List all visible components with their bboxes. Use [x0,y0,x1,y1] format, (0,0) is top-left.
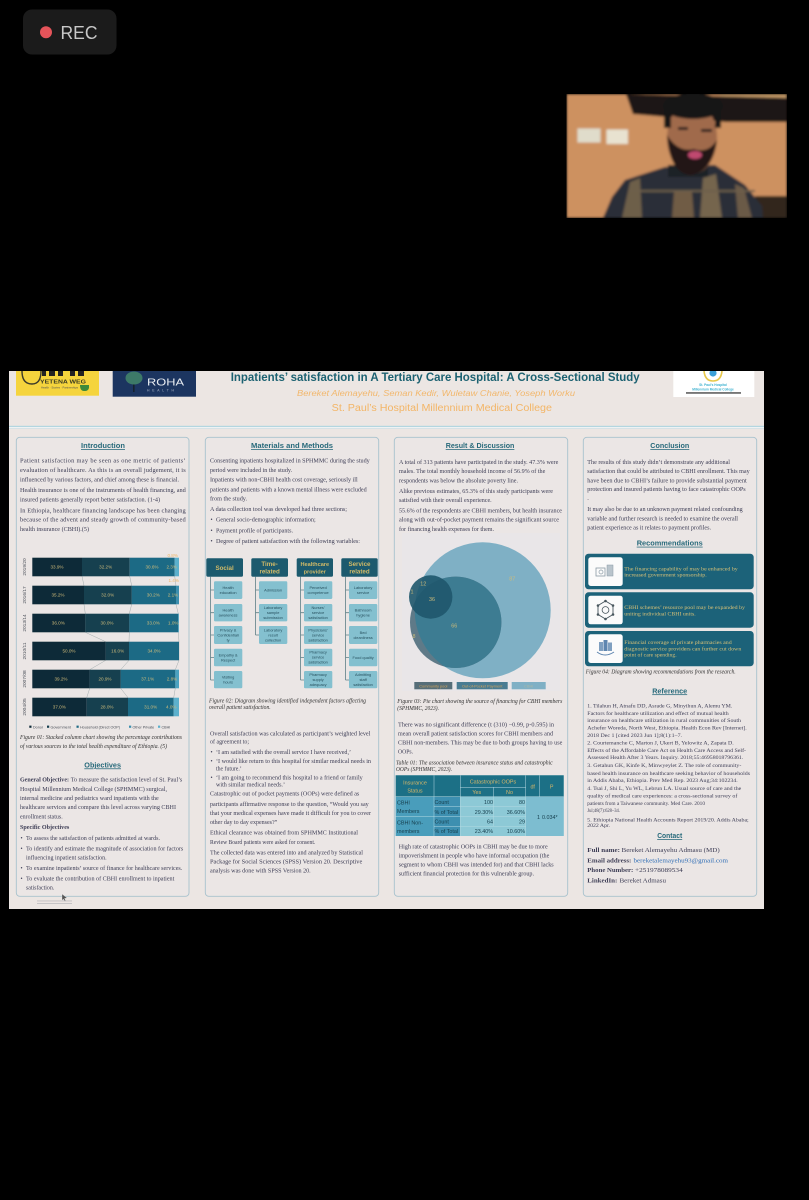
caption: figure 4: Figure 04: Diagram showing recommendations from the research. [585,669,736,676]
column: time-related: Laboratory [264,627,282,632]
column: healthcare provider: Physicians’ [308,627,328,632]
methods text: measures and analysis: ‘I am satisfied with the overall service I have received,’ [216,749,351,756]
column: healthcare provider: service [312,655,324,660]
methods text: • [210,518,213,524]
pie chart legend [414,682,546,689]
table: insurance status and catastrophic OOPs: Insurance [403,780,427,786]
heading: materials and methods: Materials and Methods [251,441,333,450]
table: insurance status and catastrophic OOPs: Yes [472,790,481,796]
column: healthcare provider: service [312,610,324,615]
column: healthcare provider: Nurses’ [311,605,325,610]
results text: significance [398,721,562,756]
column: social: hours [223,680,233,685]
column: healthcare provider: competence [307,590,329,595]
reference list: 3. Getahun GK, Kinfe K, Minwyeylet Z. The role of community- [587,762,741,769]
methods text: measures and analysis: ‘I would like return to this hospital for similar medical needs in [216,758,372,765]
caption: table 1: Table 01: The association between insurance status and catastrophic [396,760,553,766]
caption: figure 1: of various sources to the total health expenditure of Ethiopia. (5) [20,743,167,750]
stacked bar chart: health expenditure sources: 2016/17 [22,586,28,604]
column: time-related [251,558,288,644]
recommendation 2: CBHI schemes’ resource pool may be expanded by [624,605,745,611]
table: insurance status and catastrophic OOPs: 64 [487,820,493,826]
reference list: Achefer Woreda, North West, Ethiopia. Health Econ Rev [Internet]. [587,724,747,732]
table: insurance status and catastrophic OOPs: members [397,829,420,835]
stacked bar chart: health expenditure sources: 2.3% [166,565,177,570]
reference list: in Addis Ababa, Ethiopia. Prev Med Rep. 2023 Aug;34:102234. [587,778,738,784]
heading: result and discussion: Result & Discussion [446,441,515,450]
methods text [210,458,370,545]
caption: figure 2: Figure 02: Diagram showing identified independent factors affecting [208,698,367,705]
results text: significance: There was no significant difference (t (310) −0.99, p-0.595) in [398,721,555,728]
objectives text: To examine inpatients’ source of finance for healthcare services. [26,865,183,872]
panel: introduction and objectives [16,437,189,896]
poster [9,365,764,909]
column: social: ty [227,637,230,642]
reference list: quality of medical care experiences: a cross-sectional survey of [587,792,737,800]
stacked bar chart: health expenditure sources: 2.1% [168,593,178,598]
objectives text: • [20,846,23,852]
column: healthcare provider: supply [312,677,324,682]
methods text: measures and analysis [210,731,372,875]
caption: figure 2 [208,698,367,711]
heading: reference: Reference [652,686,687,695]
chart legend: Other Private [132,725,154,729]
introduction text [20,458,186,533]
caption: figure 3: (SPHMMC, 2023). [397,705,439,712]
table: insurance status and catastrophic OOPs: Members [397,809,420,815]
methods text: Payment profile of participants. [216,527,293,534]
reference list: 4. Tsai J, Shi L, Yu WL, Lebrun LA. Usual source of care and the [587,785,742,792]
table: insurance status and catastrophic OOPs: Catastrophic OOPs [470,780,517,786]
methods text: measures and analysis: participants affirmative response to the question, “Would you say [210,801,369,808]
column: service related: hygiene [356,613,370,618]
chart legend: Donor [33,725,44,729]
discussion text: High rate of catastrophic OOPs in CBHI may be due to more [399,843,548,850]
stacked bar chart: health expenditure sources: 36.0% [52,621,65,626]
logo: Yetena Wegi: YETENA WEG [40,380,86,386]
webcam video of speaker [566,93,787,218]
introduction text: Patient satisfaction may be seen as one metric of patients’ [20,458,186,465]
column: service related: Bed [360,630,367,635]
methods text: • [210,539,213,545]
column: time-related: collection [265,637,281,642]
conclusion text: It may also be due to an unknown payment related confounding [587,506,743,513]
recommendation 3: point of care spending. [624,652,677,659]
column: social [206,558,243,688]
contact details: Full name: [587,847,620,854]
column: social: awareness [219,613,238,618]
stacked bar chart: health expenditure sources: 30.6% [145,565,159,570]
recommendation 2: uniting individual CBHI units. [624,611,696,617]
contact details: LinkedIn: [587,877,617,884]
footer fine print [37,900,72,904]
column: healthcare provider: adequacy [310,682,327,687]
stacked bar chart: health expenditure sources: 2.8% [167,677,177,682]
stacked bar chart: health expenditure sources: 32.0% [101,593,114,598]
column: service related: related [349,568,370,575]
stacked bar chart: health expenditure sources: 50.0% [62,649,76,654]
methods text: Inpatients with non-CBHI health cost coverage, seriously ill [210,477,358,484]
introduction text: Health insurance is one of the instruments of health financing, and [20,487,186,494]
institution: St. Paul’s Hospital Millennium Medical College [332,403,553,414]
stacked bar chart: health expenditure sources: 30.0% [100,621,114,626]
contact details: +251978089534 [635,867,683,874]
results text: for financing health expenses for them. [399,526,494,533]
caption: table 1: OOPs (SPHMMC, 2023). [396,766,452,773]
conclusion text: variable and further research is needed to examine the overall [587,515,738,522]
column: service related: staff [359,677,368,682]
results text: A total of 313 patients have participated in the study. 47.3% were [399,459,558,466]
methods text: measures and analysis: analysis was done with SPSS Version 20. [210,868,311,875]
methods text: measures and analysis: with similar medical needs.’ [216,781,285,788]
introduction text: because of the advent and steady growth of community-based [20,517,186,524]
stacked bar chart: health expenditure sources: 2004/05 [22,698,28,716]
results text: Alike previous estimates, 65.3% of this study participants were [399,488,553,495]
chart legend: Government [50,725,71,729]
column: service related: Bathroom [355,608,372,613]
conclusion text: satisfaction that could be attributed to CBHI enrollment. This may [587,468,750,475]
discussion text: sufficient financial protection for this vulnerable group. [399,871,534,878]
table: insurance status and catastrophic OOPs: CBHI Non- [397,820,423,826]
heading: conclusion: Conclusion [650,441,690,450]
column: social: Confidentiali [217,632,239,637]
contact details: Phone Number: [587,867,633,874]
results text: significance: mean overall patient satisfaction scores for CBHI members and [398,730,554,737]
table: insurance status and catastrophic OOPs: P [550,784,554,790]
methods text: measures and analysis: of agreement to; [210,738,249,745]
title: Inpatients’ satisfaction in A Tertiary Care Hospital: A Cross-Sectional Study [231,371,640,384]
conclusion text: . [587,495,589,502]
results text: along with out-of-pocket payment remains the significant source [399,517,559,524]
contact details: Email address: [587,857,631,864]
panel: result and discussion [394,437,568,896]
venn pie chart: source of financing: 8 [412,634,416,640]
objectives text: Hospital Millennium Medical College (SPHMMC) surgical, [20,786,167,793]
objectives text: General Objective: [20,777,69,784]
methods text: measures and analysis: Package for Social Sciences (SPSS) Version 20. Descriptive [210,859,362,866]
methods text: measures and analysis: • [210,775,213,781]
table: insurance status and catastrophic OOPs: 100 [484,800,493,806]
methods text: General socio-demographic information; [216,517,316,524]
recommendation 3: Financial coverage of private pharmacies and [624,639,732,646]
discussion text: impoverishment in people who have informal occupation (the [399,852,549,859]
contact details: Bereket Admasu [620,877,667,884]
conclusion text: have been due to CBHI’s failure to provide substantial payment [587,477,747,484]
stacked bar chart: health expenditure sources: 2013/14 [22,614,28,632]
chart legend: CBHI [162,725,170,729]
venn pie chart: source of financing: 87 [509,577,515,583]
table: insurance status and catastrophic OOPs: 29 [519,820,525,826]
table: insurance status and catastrophic OOPs: No [506,790,513,796]
caption: figure 3: Figure 03: Pie chart showing the source of financing for CBHI members [396,698,563,705]
column: healthcare provider: provider [304,569,327,575]
conclusion text: protection and insured patients having to face catastrophic OOPs [587,486,746,493]
objectives text: Specific Objectives [20,824,70,831]
conclusion text [587,459,750,531]
column: service related: Laboratory [354,585,372,590]
logo: Roha Health [112,371,196,397]
methods text: patients and patients with a known mental illness were excluded [210,486,367,493]
logo: St. Paul's Hospital [673,371,754,397]
column: healthcare provider: Healthcare [300,562,329,568]
methods text: • [210,528,213,534]
objectives text: healthcare services and compare this level across varying CBHI [20,804,176,811]
table: insurance status and catastrophic OOPs [396,775,564,836]
column: social: Health [222,608,234,613]
reference list: 2. Courtemanche C, Marton J, Ukert B, Yelowitz A, Zapata D. [587,740,734,746]
panel: conclusion, recommendations, reference, contact [583,437,757,896]
conclusion text: The results of this study didn’t demonstrate any additional [587,459,730,466]
column: social: Health [222,585,234,590]
recommendation 3: diagnostic service providers can further cut down [624,645,741,652]
objectives text: • [20,866,23,872]
stacked bar chart: health expenditure sources: 34.0% [147,649,161,654]
column: time-related: sample [267,610,279,615]
objectives text: • [20,836,23,842]
stacked bar chart: health expenditure sources: 33.0% [147,621,160,626]
discussion text [399,843,554,878]
methods text: measures and analysis: the future.’ [216,765,242,772]
column: healthcare provider: Perceived [309,585,327,590]
reference list: 2018 Dec 1 [cited 2023 Jun 1];8(1):1–7. [587,732,683,739]
conclusion text: patient experience as it relates to payment profiles. [587,524,711,531]
methods text: measures and analysis: • [210,759,213,765]
objectives text: satisfaction. [26,885,55,892]
column: time-related: Laboratory [264,605,282,610]
table: insurance status and catastrophic OOPs: CBHI [397,800,410,806]
objectives text: internal medicine and pediatrics ward inpatients with the [20,795,159,802]
methods text: measures and analysis: other day to day expenses?” [210,819,277,826]
methods text: Consenting inpatients hospitalized in SPHMMC during the study [210,458,370,465]
objectives text: To assess the satisfaction of patients admitted at wards. [26,835,160,842]
column: social: Respect [221,657,236,662]
methods text: A data collection tool was developed had three sections; [210,506,347,513]
stacked bar chart: health expenditure sources: 2007/08 [22,670,28,688]
column: service related: cleanliness [353,635,373,640]
recording indicator [23,10,116,54]
column: healthcare provider: satisfaction [308,660,328,665]
stacked bar chart: health expenditure sources: 37.1% [141,677,154,682]
reference list: 1. Tilahun H, Atnafu DD, Asrade G, Minyihun A, Alemu YM. [587,702,733,710]
venn pie chart: source of financing [409,542,551,690]
logo: Yetena Wegi: Health · Stories · Partnerships [41,386,79,390]
table: insurance status and catastrophic OOPs: 10.60% [507,829,525,835]
column: time-related: submission [263,615,283,620]
methods text: from the study. [210,495,247,502]
table: insurance status and catastrophic OOPs: 23.40% [475,829,493,835]
column: time-related: Time- [261,561,278,568]
recommendation 1 [585,554,754,589]
chart legend [29,725,170,729]
methods text: measures and analysis: Catastrophic out of pocket payments (OOPs) were defined as [210,791,360,798]
discussion text: segment to whom CBHI was intended for) and that CBHI lacks [399,862,554,869]
stacked bar chart: health expenditure sources: 32.2% [99,565,112,570]
mouse cursor [62,894,67,902]
table: insurance status and catastrophic OOPs: 29.30% [475,810,493,816]
chart legend: Household (Direct OOP) [80,725,120,729]
introduction text: In Ethiopia, healthcare financing landscape has been changing [20,507,186,514]
column: healthcare provider: service [312,632,324,637]
table: insurance status and catastrophic OOPs: Status [407,788,423,794]
venn pie chart: source of financing: 66 [451,623,457,629]
column: social: Visiting [222,675,234,680]
introduction text: evaluation of healthcare. As this is an overall judgement, it is [20,467,186,474]
column: healthcare provider: Pharmacy [309,650,327,655]
column: service related [341,558,378,688]
venn pie chart: source of financing: 36 [429,597,435,603]
objectives text: To evaluate the contribution of CBHI enrollment to inpatient [26,875,175,882]
objectives text: • [20,876,23,882]
heading: objectives: Objectives [84,760,121,769]
stacked bar chart: health expenditure sources: 4.0% [166,705,177,710]
methods text: measures and analysis: ‘I am going to recommend this hospital to a friend or family [216,774,363,781]
stacked bar chart: health expenditure sources: 30.2% [147,593,160,598]
contact details: Bereket Alemayehu Admasu (MD) [622,847,720,854]
recommendation 1: increased government sponsorship. [624,573,707,579]
methods text: period were included in the study. [210,467,292,474]
column: social: education [220,590,237,595]
table: insurance status and catastrophic OOPs: % of Total [434,829,458,835]
caption: figure 1: Figure 01: Stacked column chart showing the percentage contributions [19,734,182,741]
methods text: Degree of patient satisfaction with the following variables: [216,538,360,545]
venn pie chart: source of financing: 1 [410,590,414,596]
stacked bar chart: health expenditure sources: 20.9% [98,677,112,682]
column: social: Privacy & [220,627,237,632]
introduction text: health insurance (CBHI).(5) [20,526,89,533]
methods text: measures and analysis: The collected data was entered into and analyzed by Statistical [210,849,363,856]
column: healthcare provider: Pharmacy [309,672,327,677]
diagram: independent factors [206,558,378,688]
objectives text: influencing inpatient satisfaction. [26,855,107,862]
stacked bar chart: health expenditure sources: 39.2% [54,677,68,682]
stacked bar chart: health expenditure sources: 33.9% [50,565,64,570]
objectives text: enrollment status. [20,813,63,820]
table: insurance status and catastrophic OOPs: df [530,784,535,790]
pie chart legend: Community pool [419,683,447,688]
table: insurance status and catastrophic OOPs: 80 [519,800,525,806]
results text: satisfied with their overall experience. [399,497,492,504]
stacked bar chart: health expenditure sources [22,553,179,729]
methods text: measures and analysis: Ethical clearance was obtained from SPHMMC Institutional [210,830,358,837]
heading: recommendations: Recommendations [637,539,703,548]
results text: significance: OOPs. [398,749,413,756]
reference list: based health insurance on healthcare seeking behavior of households [587,770,751,777]
stacked bar chart: health expenditure sources: 2019/20 [22,558,28,576]
column: time-related: result [268,632,279,637]
caption: figure 2: overall patient satisfaction. [209,704,271,711]
table: insurance status and catastrophic OOPs: 36.60% [507,810,525,816]
column: healthcare provider: satisfaction [308,615,328,620]
stacked bar chart: health expenditure sources: 1.0% [168,621,179,626]
authors: Bereket Alemayehu, Seman Kedir, Wuletaw Chanie, Yoseph Worku [297,388,575,398]
logo: Roha Health: HEALTH [147,388,175,392]
column: service related: service [357,590,369,595]
results text [399,459,562,533]
pie chart legend: CBHI [524,683,533,688]
logo: Yetena Wegi [16,371,99,396]
table: insurance status and catastrophic OOPs: Count [434,820,449,826]
reference list: Jul;48(7):628–34. [587,807,620,814]
objectives text: To measure the satisfaction level of St. Paul’s [71,777,183,784]
stacked bar chart: health expenditure sources: 2010/11 [22,642,28,659]
stacked bar chart: health expenditure sources: 1.4% [168,578,179,583]
methods text: measures and analysis: Overall satisfaction was calculated as participant’s weighted level [210,731,371,738]
results text: significance: CBHI non-members. This may be due to both groups having to use [398,740,562,747]
recommendation 3 [585,631,754,666]
column: service related: Admitting [355,672,371,677]
reference list: Assessed Health After 3 Years. Inquiry. 2018;55:46958018796361. [587,754,744,761]
table: insurance status and catastrophic OOPs: 0.034* [542,815,558,821]
table: insurance status and catastrophic OOPs: Count [434,800,449,806]
reference list: Effects of the Affordable Care Act on Health Care Access and Self- [587,747,746,754]
reference list: 5. Ethiopia National Health Accounts Report 2019/20. Addis Ababa; [587,818,749,824]
results text: males. The total monthly household income of 56.9% of the [399,468,545,475]
objectives text [20,777,184,892]
objectives text: To identify and estimate the magnitude of association for factors [26,845,184,852]
heading: contact: Contact [657,831,683,840]
stacked bar chart: health expenditure sources: 16.0% [111,649,124,654]
stacked bar chart: health expenditure sources: 28.0% [100,705,114,710]
methods text: measures and analysis: Review Board patients were asked for consent. [210,839,316,846]
reference list: patients from a Taiwanese community. Med Care. 2010 [587,800,705,807]
caption: table 1 [396,760,553,773]
table: insurance status and catastrophic OOPs: % of Total [434,810,458,816]
contact details: bereketalemayehu93@gmail.com [634,857,729,864]
recommendation 1: The financing capability of may be enhanced by [624,565,738,572]
column: time-related: Admission [264,587,282,592]
recommendation 2 [585,592,754,628]
introduction text: influenced by various factors, and chief among these is financial. [20,476,179,483]
results text: 55.6% of the respondents are CBHI members, but health insurance [399,508,562,515]
introduction text: insured patients generally report better satisfaction. (1-4) [20,496,160,503]
methods text: measures and analysis: that your medical expenses have made it difficult for you to cover [210,810,372,817]
logo: Roha Health: ROHA [147,376,184,388]
stacked bar chart: health expenditure sources: 31.0% [144,705,157,710]
caption: figure 3 [396,698,563,712]
contact details [587,847,729,884]
column: healthcare provider [297,558,333,688]
column: service related: satisfaction [353,682,373,687]
column: social: Empathy & [219,652,238,657]
venn pie chart: source of financing: 12 [420,582,426,588]
stacked bar chart: health expenditure sources: 0.8% [167,553,178,558]
stacked bar chart: health expenditure sources: 37.0% [53,705,66,710]
caption: figure 1 [19,734,182,750]
methods text: measures and analysis: • [210,750,213,756]
logo: St. Paul's Hospital: Millennium Medical College [692,387,734,391]
pie chart legend: Out-of-Pocket Payment [462,683,503,688]
results text: respondents was below the absolute poverty line. [399,477,518,484]
column: service related: Service [348,561,371,568]
reference list: Factors for healthcare utilization and effect of mutual health [587,710,729,717]
stacked bar chart: health expenditure sources: 35.2% [51,593,65,598]
logo: St. Paul's Hospital: St. Paul's Hospital [699,383,727,387]
table: insurance status and catastrophic OOPs: 1 [537,815,540,821]
recording indicator: REC [60,22,98,43]
column: social: Social [215,565,234,572]
reference list [587,702,751,829]
panel: materials and methods [205,437,379,896]
column: healthcare provider: satisfaction [308,637,328,642]
reference list: 2022 Apr. [587,823,611,829]
heading: introduction: Introduction [81,441,125,450]
reference list: insurance on healthcare utilization in rural communities of South [587,717,741,724]
column: time-related: related [259,568,280,575]
column: service related: Food quality [352,655,374,660]
